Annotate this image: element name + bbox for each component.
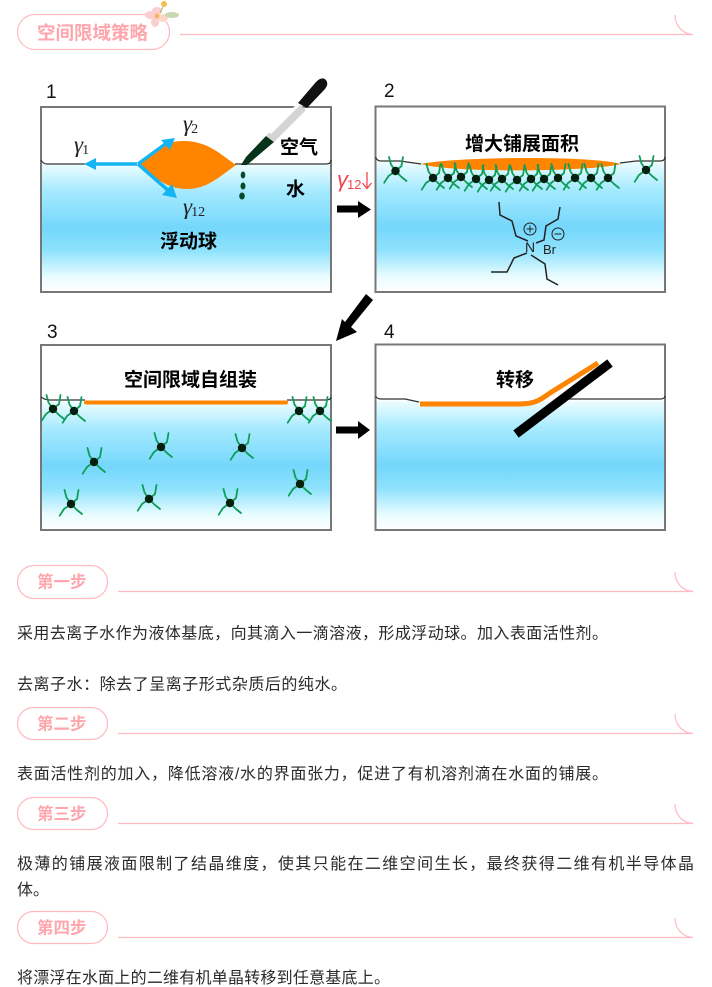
water: [41, 164, 331, 292]
label gamma 1: γ: [74, 132, 84, 157]
panel number 2: 2: [384, 81, 395, 102]
surfactant monolayer: [384, 156, 657, 192]
deionized water note: 去离子水：除去了呈离子形式杂质后的纯水。: [17, 676, 347, 694]
panel number 1: 1: [46, 82, 57, 103]
water: [41, 402, 331, 530]
spreading film: [421, 158, 621, 170]
panel 4: transfer: [376, 322, 665, 530]
tension arrows: [84, 138, 177, 198]
label: gamma 12 decreases: [337, 167, 372, 192]
crystal film: [86, 400, 286, 404]
label gamma 2: γ: [183, 111, 193, 136]
water: [376, 162, 665, 292]
substrate: [516, 363, 610, 434]
label gamma 1: 1: [82, 143, 89, 158]
step 3 text: 极薄的铺展液面限制了结晶维度，使其只能在二维空间生长，最终获得二维有机半导体晶: [17, 855, 694, 873]
step 3 text: 体。: [17, 881, 49, 899]
orange droplet: [139, 141, 236, 189]
label water: 水: [286, 178, 305, 200]
step 3 header: [18, 798, 693, 830]
arrow: panel 2 to 3: [336, 294, 373, 341]
falling drops: [239, 172, 246, 200]
label air: 空气: [280, 136, 318, 158]
panel number 4: 4: [384, 322, 395, 343]
label gamma 12: γ: [183, 194, 193, 219]
section header: 空间限域策略: 空间限域策略: [37, 22, 149, 44]
water surface line: [41, 160, 331, 164]
dropper: [241, 78, 327, 165]
step 3 header: 第三步: [37, 804, 86, 824]
chemical structure: tetrabutylammonium bromide: Br: [543, 242, 557, 257]
chemical structure: tetrabutylammonium bromide: N: [525, 239, 535, 255]
title: 转移: [496, 369, 534, 391]
water surface line: [376, 396, 665, 402]
title: 增大铺展面积: [465, 132, 579, 155]
step 2 header: 第二步: [37, 714, 86, 734]
surfactant molecules: [42, 395, 331, 516]
step 4 text: 将漂浮在水面上的二维有机单晶转移到任意基底上。: [17, 968, 390, 987]
chemical structure: tetrabutylammonium bromide: [491, 202, 564, 285]
step 1 text: 采用去离子水作为液体基底，向其滴入一滴溶液，形成浮动球。加入表面活性剂。: [17, 624, 608, 642]
section header: 空间限域策略: [18, 14, 693, 50]
label floating ball: 浮动球: [160, 230, 217, 252]
icon: flower decoration: [145, 1, 179, 27]
title: 空间限域自组装: [124, 368, 257, 391]
water surface line: [41, 397, 331, 400]
panel 2: increased spreading area: [376, 81, 665, 292]
panel frame: [41, 107, 331, 292]
step 2 header: [18, 708, 693, 740]
water: [376, 401, 665, 530]
label: gamma 12 decreases: 12: [347, 177, 361, 192]
panel frame: [376, 344, 665, 530]
film on substrate: [420, 363, 598, 404]
step 1 header: [18, 566, 693, 598]
step 1 header: 第一步: [37, 572, 86, 592]
step 3 text: [17, 855, 694, 899]
step 4 header: [18, 912, 693, 944]
panel frame: [376, 106, 665, 292]
panel number 3: 3: [47, 322, 58, 343]
label: gamma 12 decreases: γ: [337, 167, 350, 192]
step 2 text: 表面活性剂的加入，降低溶液/水的界面张力，促进了有机溶剂滴在水面的铺展。: [17, 765, 608, 783]
label gamma 12: 12: [191, 205, 205, 220]
arrow: panel 1 to 2: [337, 201, 371, 218]
step 4 header: 第四步: [37, 918, 86, 938]
panel 1: floating ball: [41, 78, 331, 292]
water surface line: [376, 157, 665, 164]
panel 3: confined self-assembly: [41, 322, 331, 530]
label gamma 2: 2: [191, 122, 198, 137]
panel frame: [41, 345, 331, 530]
arrow: panel 3 to 4: [336, 421, 370, 439]
